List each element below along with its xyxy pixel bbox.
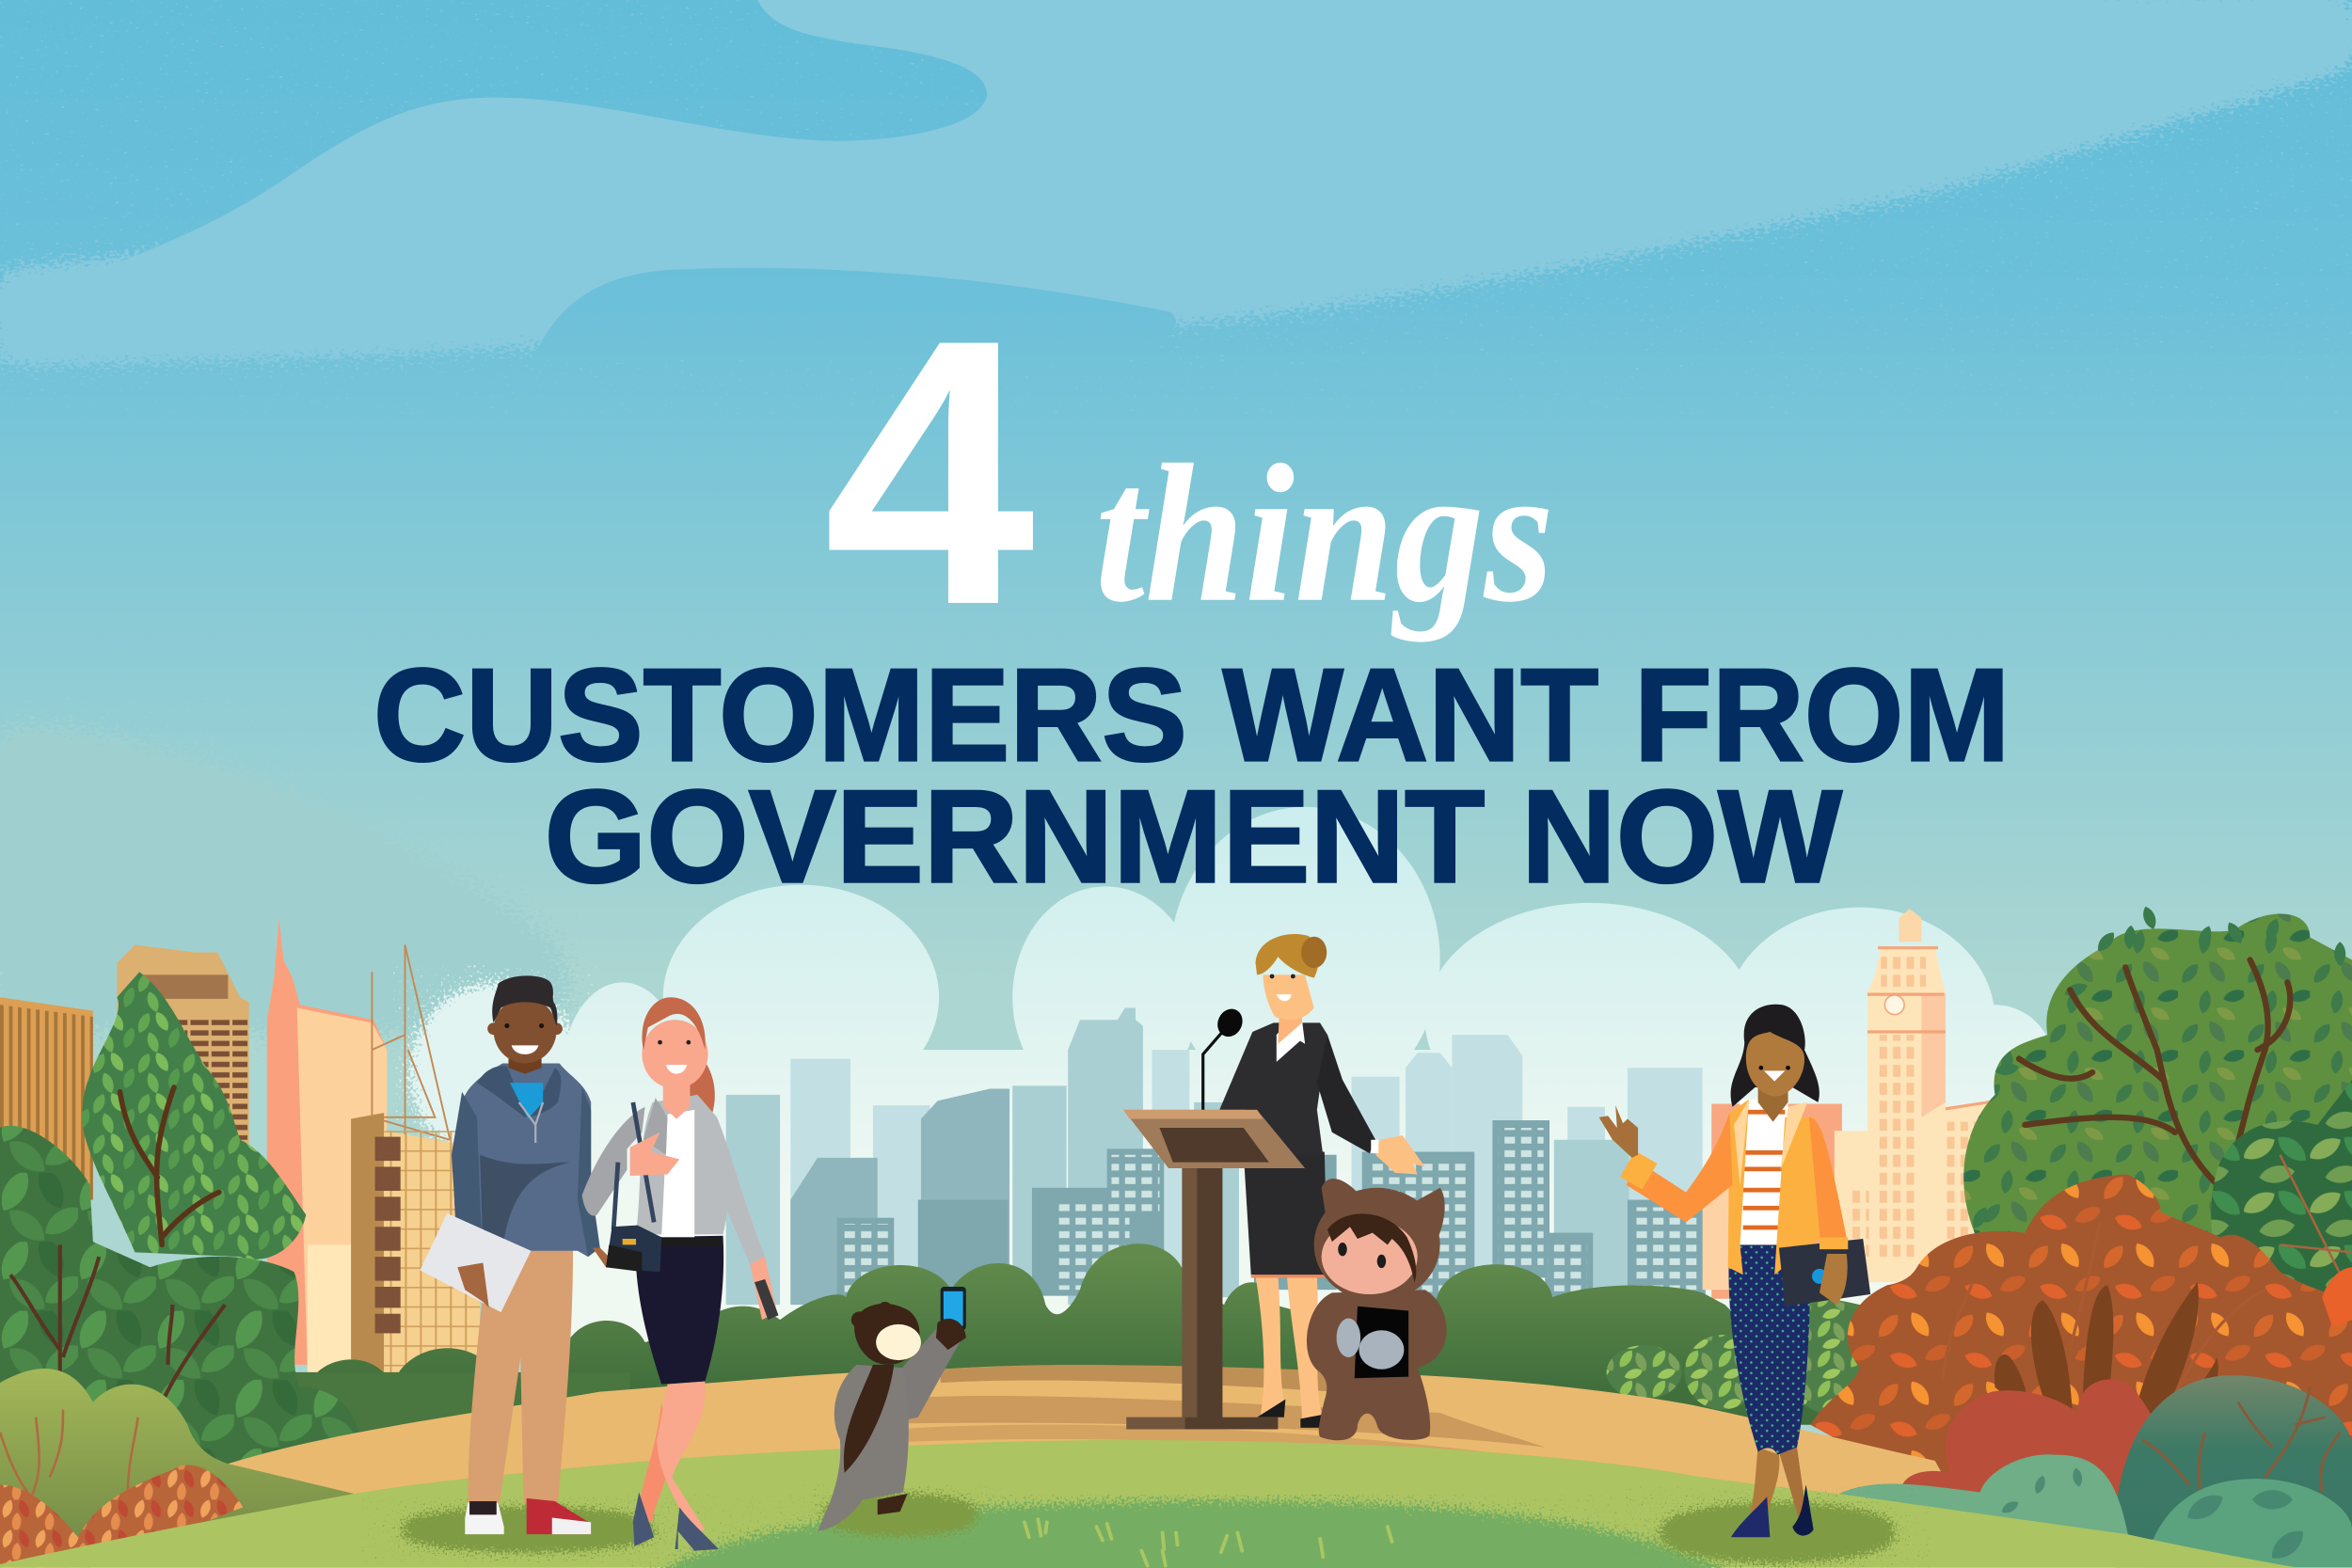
front leg [1747,1448,1779,1529]
paw [936,1319,966,1350]
heels [633,1492,719,1551]
blouse [1277,1020,1304,1062]
blazer [636,1095,728,1234]
person: woman waving [1599,1005,1870,1537]
numeral 4: 4 [823,261,1038,684]
neck [1278,1007,1302,1044]
neck [663,1080,690,1118]
phone [755,1279,778,1320]
head [1314,1188,1440,1302]
bush: large dark green [0,1126,360,1478]
hands [1375,1135,1425,1174]
person: woman with bag [582,997,778,1551]
hair [492,975,557,1026]
body [818,1365,909,1531]
neck [508,1050,542,1074]
sky: grainy haze band [0,0,2352,360]
hair [1731,1005,1820,1107]
tree: large oak [1963,905,2352,1350]
stripe [844,1365,894,1473]
base [1126,1418,1278,1429]
cloud puff left [417,990,573,1155]
post [1182,1133,1201,1426]
tablet [1355,1307,1408,1378]
title [373,261,2010,911]
shrub: autumn low [0,1465,243,1567]
legs [1256,1276,1284,1418]
sky: low haze [0,735,558,1020]
shirt [661,1110,694,1237]
body [1307,1290,1447,1440]
face details [1758,1066,1763,1070]
arm [582,1107,645,1216]
hedge base behind path [210,1372,630,1484]
folder [420,1213,531,1312]
left trees [0,972,360,1567]
astro mascot [1307,1179,1447,1440]
hoodie [453,1063,600,1267]
hair [1256,934,1319,978]
bush: olive mound [0,1369,354,1567]
person: man with folder [420,975,615,1534]
left skyline buildings [0,918,480,1387]
phone [941,1287,966,1330]
neck [1758,1080,1788,1122]
raised arm [1626,1113,1733,1222]
hair [1327,1213,1416,1282]
eyes [1338,1243,1347,1256]
building: peach spire [267,918,387,1372]
bush: dark right [2211,1080,2352,1305]
building: orange striped [0,997,93,1200]
dirt path [228,1365,1965,1544]
sky: cove [532,268,1176,360]
bear mascot with phone [818,1287,966,1531]
building: tan tower [117,944,249,1155]
ears [1322,1179,1358,1218]
hair back [686,1057,715,1140]
sky: pale swoosh [0,0,2100,308]
hand 2 [1820,1254,1848,1305]
headline line 2: GOVERNMENT NOW [545,763,1842,911]
rear leg [1777,1448,1807,1522]
mitts [1337,1319,1360,1357]
skirt [636,1236,723,1385]
city skyline [726,1007,1706,1320]
hair [643,997,706,1050]
jacket [1219,1022,1327,1155]
person: speaker at podium [1219,934,1425,1428]
ground shadows [401,1498,1895,1559]
bush: autumn orange [1810,1174,2352,1499]
headline line 1: CUSTOMERS WANT FROM [373,641,2010,788]
shirt [510,1083,543,1118]
arm [885,1327,961,1425]
small green bushes [1607,1300,1875,1415]
tree: tall green [82,972,306,1259]
right trees [1810,905,2352,1499]
face details [658,1040,662,1045]
face [1322,1219,1418,1294]
hot orange leaves at right edge [2322,1267,2352,1327]
building: tan block with windows [351,1113,480,1387]
front leg [657,1381,706,1534]
head [854,1304,919,1365]
lapel [644,1098,668,1155]
red bush [1901,1379,2172,1499]
heels [1731,1497,1770,1537]
clouds [417,807,2055,1380]
podium with microphone [1123,1005,1305,1429]
tablet [1779,1239,1870,1307]
shoes [465,1498,591,1534]
pants [468,1249,573,1503]
back leg [638,1402,671,1522]
clock tower building [1703,909,2007,1299]
face details [1270,974,1274,978]
shoes [1257,1400,1285,1418]
head [642,1020,708,1089]
microphone [1203,1005,1247,1110]
background hedge [308,1243,1875,1425]
grass tufts [1025,1519,1392,1566]
scaffold [372,944,450,1163]
face [1746,1032,1804,1097]
word: things: things [1095,423,1554,643]
light towers [790,1035,1703,1320]
foot [878,1494,908,1514]
darker grass [645,1507,1755,1568]
skirt [1244,1152,1327,1275]
head [1263,974,1314,1020]
muzzle [876,1324,921,1360]
bag strap [613,1102,654,1229]
pants [1728,1244,1810,1455]
teal mounds [1839,1375,2352,1567]
hands [630,1132,679,1176]
bag [606,1226,661,1272]
cloud bank [555,807,2055,1380]
face details [504,1023,509,1028]
hand [1599,1105,1638,1158]
head [494,997,557,1063]
sleeve [1317,1035,1375,1153]
mid towers [726,1007,1629,1305]
hand [457,1263,489,1307]
top [1123,1110,1305,1168]
shirt [1740,1100,1788,1244]
dark towers [790,1089,1009,1305]
blazer [1728,1100,1749,1275]
grass hill [0,1440,2295,1568]
